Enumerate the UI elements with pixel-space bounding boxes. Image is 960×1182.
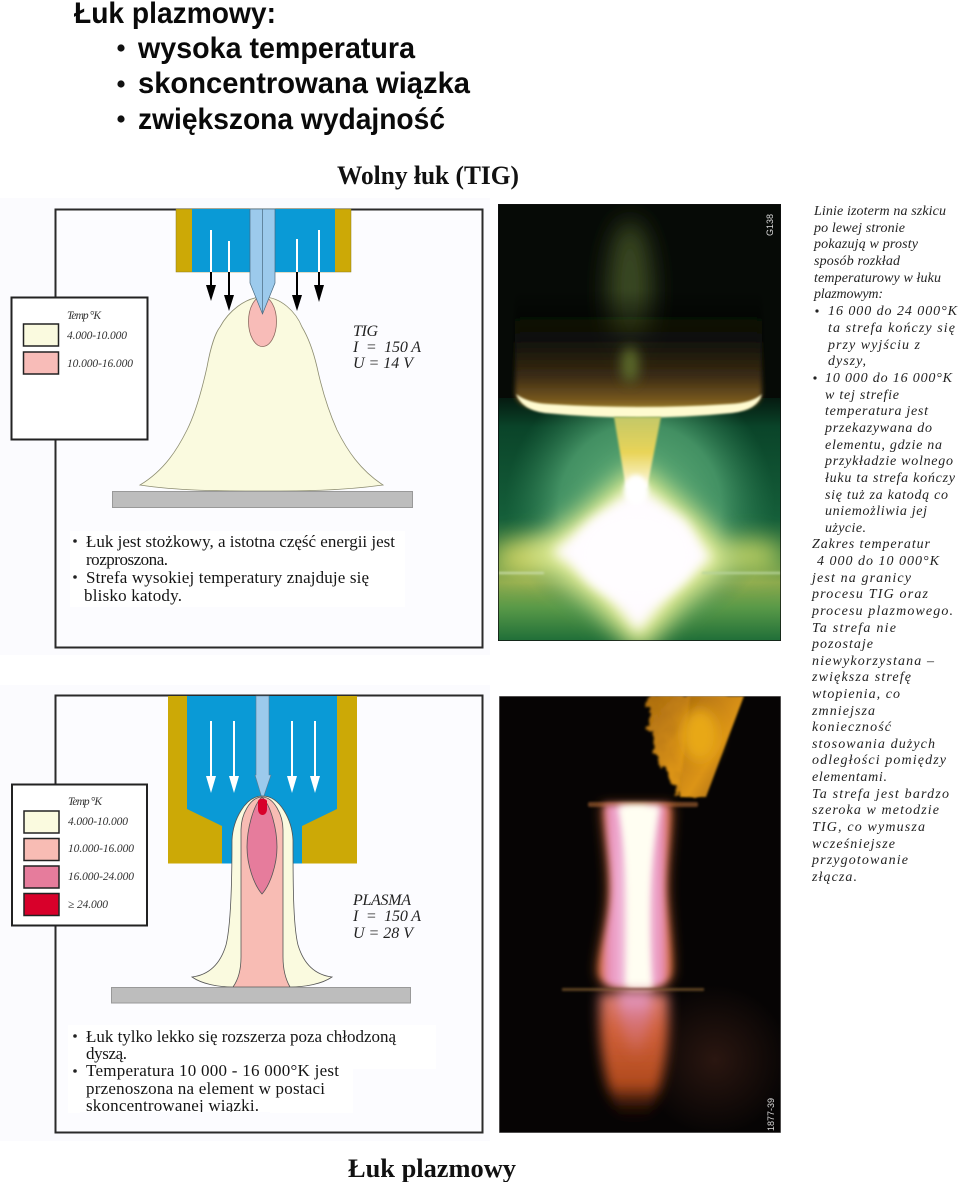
TIG arc 10000-16000 zone <box>248 296 276 346</box>
TIG legend <box>12 298 148 440</box>
TIG gas arrows <box>206 230 324 311</box>
text column: isotherm explanation: się tuż za katodą co <box>825 488 948 503</box>
text column: isotherm explanation: pozostaje <box>811 637 873 652</box>
plasma arc 4000-10000 zone <box>192 796 332 987</box>
text column: isotherm explanation: elementami. <box>812 770 887 785</box>
TIG torch nozzle <box>176 209 351 272</box>
plasma electrode <box>255 696 271 800</box>
title block: zwiększona wydajność <box>138 103 445 136</box>
TIG parameters: TIG <box>353 323 378 340</box>
plasma notes <box>68 1025 436 1118</box>
TIG legend: 10.000-16.000 <box>67 358 133 370</box>
photo code: 1877-39: 1877-39 <box>766 1098 776 1131</box>
title block <box>74 0 471 136</box>
text column: isotherm explanation: Ta strefa nie <box>812 621 896 636</box>
photo: TIG arc <box>493 204 781 655</box>
TIG electrode <box>250 209 275 314</box>
text column: isotherm explanation: TIG, co wymusza <box>812 820 925 835</box>
text column: isotherm explanation: odległości pomiędzy <box>812 753 947 768</box>
TIG legend: 4.000-10.000 <box>67 330 127 342</box>
plasma parameters: PLASMA <box>352 892 411 909</box>
plasma legend: 16.000-24.000 <box>68 871 134 883</box>
plasma notes: Łuk tylko lekko się rozszerza poza chłodzoną <box>86 1027 396 1046</box>
TIG arc 4000-10000 zone <box>140 297 383 491</box>
text column: isotherm explanation: Linie izoterm na szkicu <box>813 204 946 219</box>
text column: isotherm explanation: temperatura jest <box>825 404 929 419</box>
plasma arc 16000-24000 zone <box>247 797 277 894</box>
text column: isotherm explanation: przygotowanie <box>811 853 908 868</box>
title block: wysoka temperatura <box>137 32 416 65</box>
plasma arc 10000-16000 zone <box>233 797 290 987</box>
plasma arc above 24000 zone <box>258 799 267 815</box>
text column: isotherm explanation: przekazywana do <box>824 421 932 436</box>
plasma notes: Temperatura 10 000 - 16 000°K jest <box>86 1061 339 1080</box>
plasma notes: skoncentrowanej wiązki. <box>86 1096 259 1115</box>
plasma nozzle <box>168 696 357 864</box>
text column: isotherm explanation: konieczność <box>812 720 892 735</box>
text column: isotherm explanation: wtopienia, co <box>812 687 900 702</box>
photo: plasma arc <box>499 690 790 1135</box>
TIG workpiece <box>112 492 412 508</box>
TIG legend: Temp °K <box>67 310 102 322</box>
plasma notes: dyszą. <box>86 1044 127 1063</box>
plasma legend: Temp °K <box>68 796 103 808</box>
plasma legend: 10.000-16.000 <box>68 843 134 855</box>
text column: isotherm explanation: ta strefa kończy się <box>828 321 955 336</box>
TIG notes: rozproszona. <box>86 550 168 569</box>
text column: isotherm explanation: elementu, gdzie na <box>825 438 942 453</box>
plasma legend <box>12 784 147 926</box>
panel: TIG diagram <box>12 209 482 648</box>
text column: isotherm explanation: sposób rozkład <box>814 254 901 269</box>
plasma workpiece <box>112 988 410 1003</box>
text column: isotherm explanation: zmniejsza <box>811 704 875 719</box>
plasma legend: 4.000-10.000 <box>68 816 128 828</box>
TIG notes: Strefa wysokiej temperatury znajduje się <box>86 568 369 587</box>
text column: isotherm explanation: Zakres temperatur <box>812 537 931 552</box>
text column: isotherm explanation: niewykorzystana – <box>812 654 935 669</box>
text column: isotherm explanation: pokazują w prosty <box>813 237 919 252</box>
TIG parameters: U = 14 V <box>353 355 415 372</box>
plasma notes: przenoszona na element w postaci <box>86 1079 325 1098</box>
photo code: G138: G138 <box>765 214 775 236</box>
TIG parameters <box>352 323 421 372</box>
text column: isotherm explanation: 4 000 do 10 000°K <box>817 554 940 569</box>
text column: isotherm explanation: po lewej stronie <box>813 221 905 236</box>
text column: isotherm explanation: procesu TIG oraz <box>811 587 929 602</box>
plasma parameters: I = 150 A <box>352 908 421 925</box>
text column: isotherm explanation: przy wyjściu z <box>827 338 921 353</box>
plasma parameters: U = 28 V <box>353 925 415 942</box>
text column: isotherm explanation: wcześniejsze <box>812 837 895 852</box>
plasma parameters <box>352 892 421 942</box>
text column: isotherm explanation: 10 000 do 16 000°K <box>825 371 953 386</box>
text column: isotherm explanation: 16 000 do 24 000°K <box>828 304 958 319</box>
text column: isotherm explanation: szeroka w metodzie <box>812 803 939 818</box>
text column: isotherm explanation: przykładzie wolnego <box>824 454 953 469</box>
text column: isotherm explanation: złącza. <box>811 870 857 885</box>
text column: isotherm explanation <box>810 204 958 885</box>
text column: isotherm explanation: łuku ta strefa kończy <box>825 471 956 486</box>
text column: isotherm explanation: dyszy, <box>828 354 866 369</box>
plasma legend: ≥ 24.000 <box>68 899 108 911</box>
text column: isotherm explanation: uniemożliwia jej <box>825 504 927 519</box>
text column: isotherm explanation: procesu plazmowego. <box>811 604 953 619</box>
title block: skoncentrowana wiązka <box>138 67 471 100</box>
text column: isotherm explanation: stosowania dużych <box>812 737 935 752</box>
panel: plasma diagram <box>12 696 482 1132</box>
text column: isotherm explanation: Ta strefa jest bardzo <box>812 787 949 802</box>
text column: isotherm explanation: plazmowym: <box>813 287 883 302</box>
text column: isotherm explanation: temperaturowy w łuku <box>814 271 941 286</box>
TIG parameters: I = 150 A <box>352 339 421 356</box>
plasma gas arrows <box>206 721 320 793</box>
TIG notes <box>70 531 405 607</box>
text column: isotherm explanation: w tej strefie <box>825 388 899 403</box>
TIG notes: Łuk jest stożkowy, a istotna część energii jest <box>86 532 395 551</box>
TIG notes: blisko katody. <box>84 586 182 605</box>
text column: isotherm explanation: jest na granicy <box>810 571 912 586</box>
heading: TIG: Wolny łuk (TIG) <box>337 160 519 190</box>
text column: isotherm explanation: użycie. <box>825 521 866 536</box>
text column: isotherm explanation: zwiększa strefę <box>811 670 911 685</box>
